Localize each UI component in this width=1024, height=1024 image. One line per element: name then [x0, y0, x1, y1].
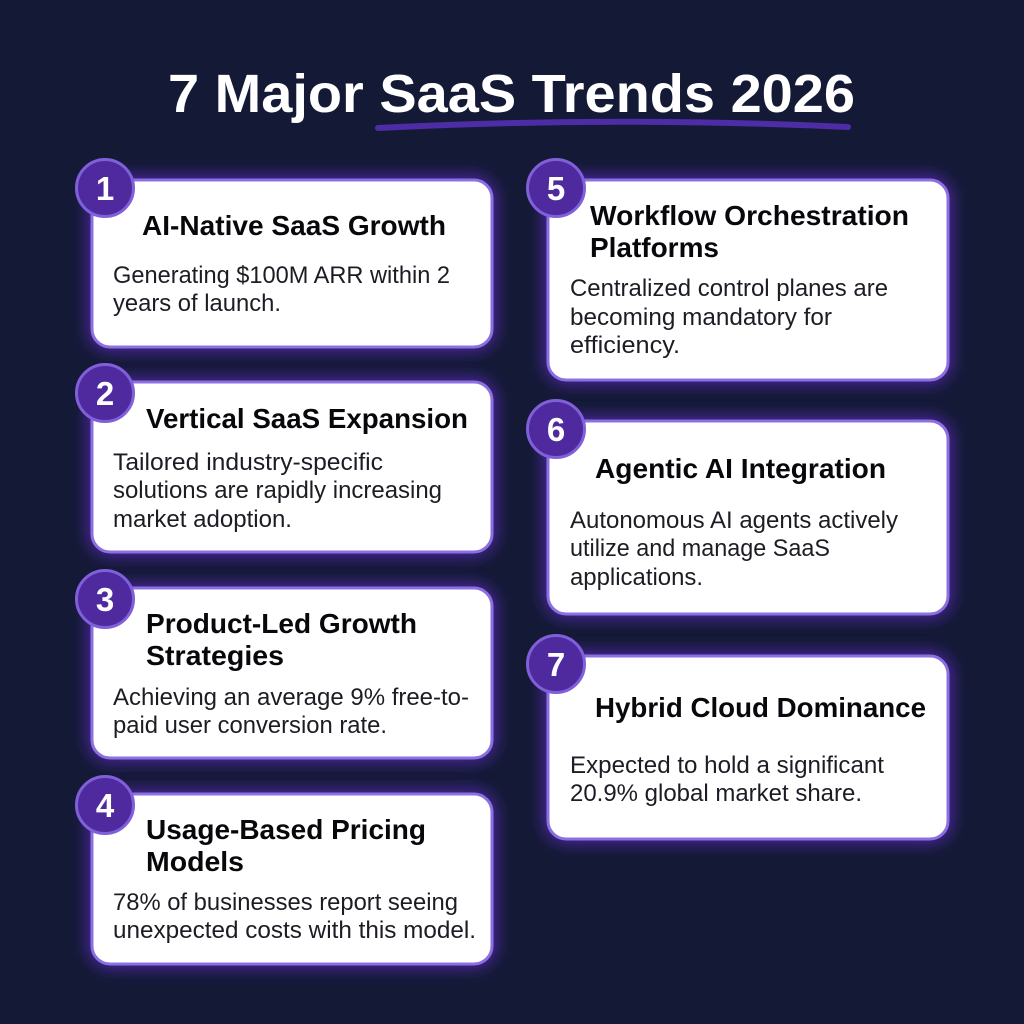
badge 4: [76, 776, 134, 834]
text 5: [570, 275, 888, 359]
badge 7: 7: [547, 646, 565, 683]
panel: trend 3: [76, 570, 492, 758]
badge 2: [76, 364, 134, 422]
text 6: Autonomous AI agents actively: [570, 507, 898, 534]
text 7: [570, 752, 884, 807]
heading 6: Agentic AI Integration: [595, 453, 886, 484]
heading 5: Workflow Orchestration: [590, 200, 909, 231]
panel: trend 1: [76, 160, 492, 347]
heading 3: Strategies: [146, 640, 284, 671]
text 3: [113, 684, 469, 739]
badge 7: [528, 636, 584, 692]
heading 4: Usage-Based Pricing: [146, 814, 426, 845]
badge 6: 6: [547, 411, 565, 448]
heading 1: AI-Native SaaS Growth: [142, 210, 446, 241]
text 5: efficiency.: [570, 332, 680, 359]
panel: trend 4: [76, 776, 492, 964]
badge 1: [76, 160, 134, 216]
text 1: years of launch.: [113, 290, 281, 317]
heading 3: [146, 608, 417, 671]
badge 2: 2: [96, 375, 114, 412]
text 3: paid user conversion rate.: [113, 712, 387, 739]
panel: trend 2: [76, 364, 492, 552]
text 5: becoming mandatory for: [570, 304, 832, 331]
heading 2: Vertical SaaS Expansion: [146, 403, 468, 434]
heading 4: [146, 814, 426, 877]
heading 4: Models: [146, 846, 244, 877]
text 4: [113, 889, 476, 944]
text 3: Achieving an average 9% free-to-: [113, 684, 469, 711]
text 5: Centralized control planes are: [570, 275, 888, 302]
text 2: market adoption.: [113, 506, 292, 533]
badge 5: 5: [547, 170, 565, 207]
text 7: Expected to hold a significant: [570, 752, 884, 779]
text 4: unexpected costs with this model.: [113, 917, 476, 944]
title: 7 Major SaaS Trends 2026: [168, 64, 855, 124]
heading 3: Product-Led Growth: [146, 608, 417, 639]
badge 5: [528, 160, 584, 216]
badge 3: 3: [96, 581, 114, 618]
badge 6: [528, 400, 584, 458]
text 6: applications.: [570, 564, 703, 591]
text 6: [570, 507, 898, 591]
badge 3: [76, 570, 134, 628]
heading 5: [590, 200, 909, 263]
panel: trend 6: [528, 400, 948, 614]
badge 4: 4: [96, 787, 115, 824]
text 6: utilize and manage SaaS: [570, 535, 830, 562]
text 2: [113, 449, 442, 533]
panel: trend 5: [528, 160, 948, 380]
text 1: Generating $100M ARR within 2: [113, 262, 450, 289]
heading 7: Hybrid Cloud Dominance: [595, 692, 926, 723]
badge 1: 1: [96, 170, 114, 207]
text 2: Tailored industry-specific: [113, 449, 383, 476]
panel: trend 7: [528, 636, 948, 839]
text 2: solutions are rapidly increasing: [113, 477, 442, 504]
text 4: 78% of businesses report seeing: [113, 889, 458, 916]
text 7: 20.9% global market share.: [570, 780, 862, 807]
text 1: [113, 262, 450, 317]
heading 5: Platforms: [590, 232, 719, 263]
